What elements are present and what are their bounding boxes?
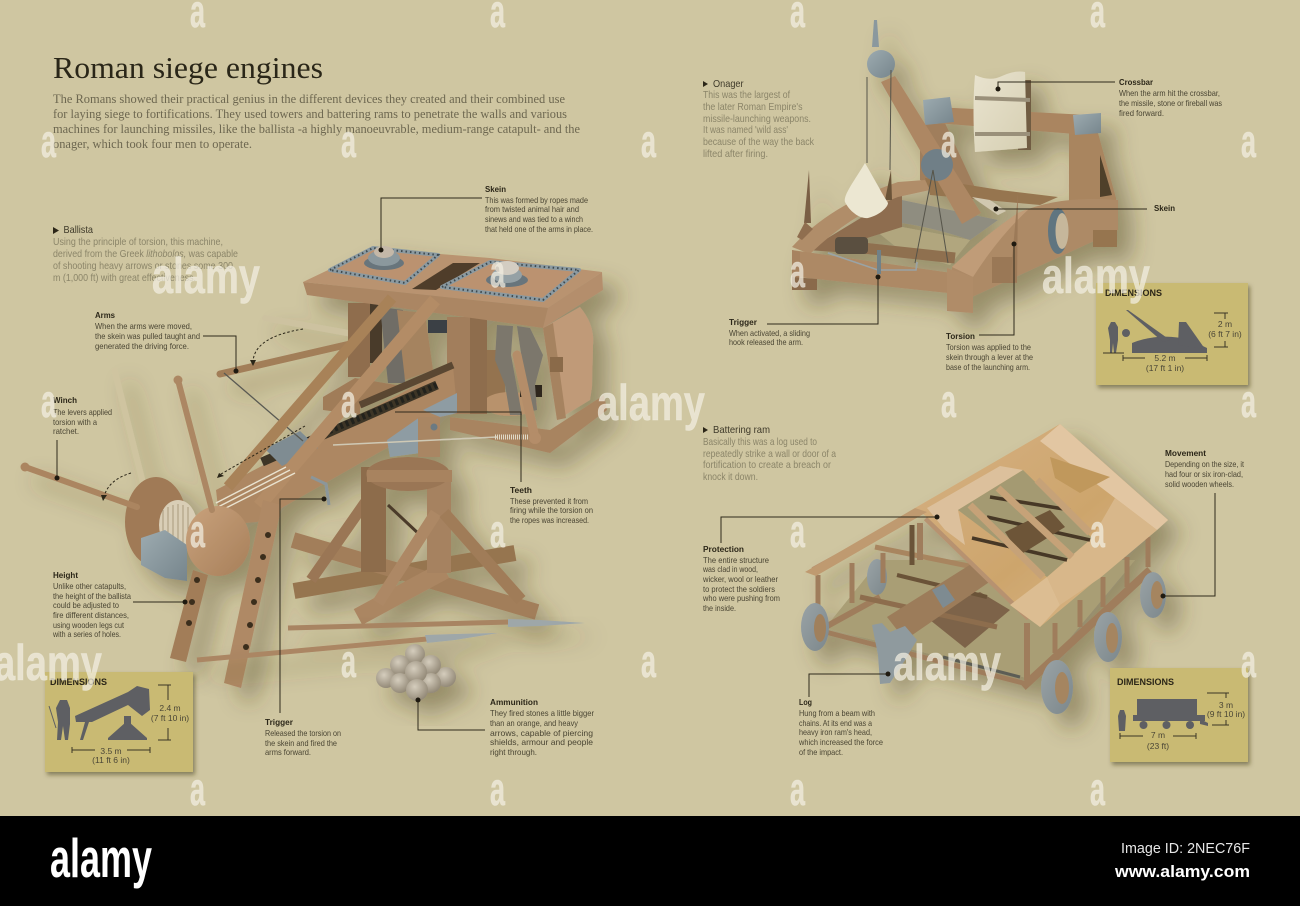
watermarks: a (1241, 375, 1256, 427)
watermarks: a (1241, 635, 1256, 687)
watermarks: a (1090, 763, 1105, 815)
text block: battering ram description: fortification to create a breach or (703, 459, 831, 471)
panel: onager dimensions (1096, 283, 1248, 385)
stones (376, 644, 456, 701)
arm (220, 344, 350, 374)
torsion string (224, 373, 528, 445)
watermarks: a (941, 375, 956, 427)
callout: movement: Depending on the size, it (1165, 459, 1245, 469)
top pin (872, 20, 879, 47)
onager height dimension (1103, 313, 1242, 353)
near skein (495, 325, 543, 415)
inner left wall (808, 193, 902, 252)
ballista width dimension: (11 ft 6 in) (92, 755, 130, 765)
text block: onager description (703, 89, 815, 160)
callout: skein: sinews and was tied to a winch (485, 214, 583, 224)
central pillar (447, 317, 487, 414)
onager height dimension: (6 ft 7 in) (1208, 329, 1242, 339)
callout: height: fire different distances, (53, 610, 129, 620)
heading: ballista: Ballista (64, 224, 93, 236)
launching arm (881, 76, 981, 224)
callout: protection: The entire structure (703, 555, 769, 565)
intro text block: machines for launching missiles, like the ballista -a highly manoeuvrable, medium-range catapult- and the (53, 122, 580, 136)
left rail (792, 180, 930, 254)
watermarks: a (1241, 115, 1256, 167)
watermarks: alamy (152, 248, 260, 304)
gable truss (813, 513, 1030, 617)
back rail (925, 178, 1058, 205)
ram head (872, 623, 917, 684)
watermarks: a (941, 115, 956, 167)
metal hook bar (828, 253, 917, 270)
winch rope (835, 237, 868, 254)
callout: winch: ratchet. (53, 426, 79, 436)
spike left (804, 170, 811, 223)
front leg (224, 500, 282, 688)
central pillar back wood (477, 350, 505, 398)
watermarks: alamy (1042, 248, 1150, 304)
gable corner patch (927, 466, 1023, 545)
heading: onager: Onager (713, 78, 744, 90)
callout: height: could be adjusted to (53, 600, 119, 610)
callout: trigger: Released the torsion on (265, 728, 341, 738)
ballista dashed motion arrows (101, 329, 305, 501)
bow lever (517, 355, 535, 438)
text block: battering ram description: Basically this was a log used to (703, 436, 817, 448)
text block: onager description: because of the way the back (703, 136, 815, 148)
callout: trigger: the skein and fired the (265, 738, 337, 748)
footer band (0, 816, 1300, 906)
watermarks: a (490, 245, 505, 297)
text block: onager description: It was named 'wild ass' (703, 124, 788, 136)
callout: onager skein: Skein (1154, 204, 1175, 213)
far pillar (348, 303, 370, 377)
right pillar (543, 307, 593, 420)
callout: crossbar: When the arm hit the crossbar, (1119, 88, 1220, 98)
callout: winch: Winch (53, 396, 77, 405)
site url: www.alamy.com (1114, 862, 1250, 881)
callout: height: the height of the ballista (53, 591, 131, 601)
frame beams (810, 523, 1150, 687)
text block: ballista description: Using the principle of torsion, this machine, (53, 236, 223, 248)
watermarks: a (641, 115, 656, 167)
skein cap right (442, 261, 579, 300)
image id: Image ID: 2NEC76F (1121, 840, 1250, 857)
torsion spike (1010, 193, 1018, 283)
leg holes (186, 532, 271, 650)
bottom frame (450, 395, 607, 453)
footer logo: alamy (50, 827, 152, 889)
callout: trigger: Trigger (265, 718, 293, 727)
callout: arms: When the arms were moved, (95, 321, 192, 331)
callout: log (798, 672, 890, 757)
interior floor (875, 227, 970, 265)
ropes (216, 467, 295, 511)
pouch (845, 163, 888, 218)
skein cap left (330, 246, 438, 283)
panel: ballista dimensions (45, 672, 193, 772)
callout: crossbar: the missile, stone or fireball was (1119, 98, 1222, 108)
callout: crossbar: Crossbar (1119, 78, 1153, 87)
panel: ballista dimensions: DIMENSIONS (50, 677, 107, 687)
purlins (972, 497, 1090, 560)
mortise block (992, 257, 1015, 283)
onager silhouette (1108, 310, 1207, 353)
callout: teeth: firing while the torsion on (510, 505, 593, 515)
callout: skein: This was formed by ropes made (485, 195, 588, 205)
stock beam (216, 366, 457, 525)
callout: winch: The levers applied (53, 407, 112, 417)
watermarks: a (641, 635, 656, 687)
front winch disc (186, 506, 250, 576)
callout: crossbar (996, 78, 1222, 118)
onager height dimension: 2 m (1218, 319, 1232, 329)
callout: log: which increased the force (798, 737, 883, 747)
callout: ammunition: shields, armour and people (490, 737, 593, 747)
axle beam (835, 245, 955, 258)
intro text block: The Romans showed their practical genius in the different devices they created and their combined use (53, 92, 565, 106)
text block: onager description: This was the largest of (703, 89, 790, 101)
rear leg (170, 570, 208, 662)
roof opening (958, 470, 1092, 577)
callout: height: Height (53, 571, 78, 580)
iron slider (265, 431, 318, 466)
front beam (792, 250, 952, 293)
callout: onager trigger: hook released the arm. (729, 337, 803, 347)
callout: log: heavy iron ram's head, (799, 727, 872, 737)
ballista height dimension (151, 685, 189, 740)
wheels (801, 572, 1166, 714)
callout: log: chains. At its end was a (799, 718, 872, 728)
arm cap (867, 50, 895, 78)
onager width dimension: 5.2 m (1154, 353, 1176, 363)
callout: ammunition: Ammunition (490, 698, 538, 707)
callout: skein: that held one of the arms in place. (485, 224, 593, 234)
iron box (141, 530, 187, 581)
watermarks: a (790, 245, 805, 297)
rafters (970, 480, 1090, 577)
callout: teeth (395, 412, 593, 525)
watermarks: a (490, 763, 505, 815)
slide channel (360, 365, 453, 405)
roof lower pale (1047, 498, 1157, 605)
pale arm ghost (265, 318, 353, 334)
callout: torsion (946, 242, 1033, 372)
watermarks: a (341, 635, 356, 687)
log (887, 527, 1043, 640)
text block: onager description: the later Roman Empire's (703, 101, 802, 113)
callout: arms (95, 311, 238, 374)
ram width dimension (1120, 730, 1196, 751)
rear winch disc (125, 477, 187, 567)
watermarks: a (790, 763, 805, 815)
ram width dimension: (23 ft) (1147, 741, 1169, 751)
battering ram illustration (801, 424, 1168, 714)
callout: movement (1160, 449, 1245, 598)
callout: protection: the inside. (703, 603, 736, 613)
callout: ammunition: than an orange, and heavy (490, 718, 579, 728)
panel: battering ram dimensions (1110, 668, 1248, 762)
text block: onager description: lifted after firing. (703, 148, 768, 160)
callout: teeth: These prevented it from (510, 496, 588, 506)
ballista machine illustration (20, 246, 607, 688)
iron ring (1048, 208, 1068, 254)
right rail (950, 199, 1118, 300)
text block: ballista description (53, 236, 238, 284)
callout: trigger (265, 496, 341, 757)
ram height dimension: (9 ft 10 in) (1207, 709, 1245, 719)
callout: height (52, 571, 188, 639)
callout: height: Unlike other catapults, (53, 581, 126, 591)
callout: winch (53, 396, 112, 480)
callout: skein: from twisted animal hair and (485, 204, 579, 214)
rear wheel (867, 559, 887, 595)
callout: teeth: Teeth (510, 486, 532, 495)
callout: height: with a series of holes. (52, 629, 121, 639)
arrow top (288, 619, 585, 628)
callout: ammunition: They fired stones a little bigger (490, 708, 594, 718)
callout: crossbar: fired forward. (1119, 108, 1164, 118)
callout: skein: Skein (485, 185, 506, 194)
floor (825, 560, 1135, 680)
callout: log: of the impact. (799, 747, 843, 757)
callout: log: Hung from a beam with (799, 708, 875, 718)
callout: arms: the skein was pulled taught and (95, 331, 200, 341)
small wood spike (885, 170, 892, 200)
skein band (902, 200, 998, 240)
heading: ballista (53, 224, 93, 236)
callout: onager trigger (729, 274, 880, 347)
roof (915, 424, 1168, 627)
pale lever ghost (114, 368, 146, 495)
left lower frame (323, 378, 402, 415)
right post (1069, 133, 1116, 222)
panel: onager dimensions: DIMENSIONS (1105, 288, 1162, 298)
callout: onager trigger: When activated, a sliding (729, 328, 810, 338)
callout: skein (378, 185, 593, 252)
ballista silhouette (49, 686, 150, 740)
watermarks: a (341, 375, 356, 427)
callout: height: using wooden legs cut (53, 620, 125, 630)
callout: torsion: Torsion was applied to the (946, 342, 1031, 352)
iron rod (943, 657, 1020, 677)
watermarks: a (1090, 505, 1105, 557)
intro text block: for laying siege to fortifications. They used towers and battering rams to penetrate the walls and various (53, 107, 567, 121)
left post (920, 123, 977, 192)
text block: battering ram description: knock it down. (703, 471, 758, 483)
ballista width dimension (72, 746, 150, 765)
callout: protection: to protect the soldiers (703, 584, 775, 594)
crossbar (935, 107, 1088, 135)
callout: movement: Movement (1165, 449, 1206, 458)
iron trigger hook (311, 477, 329, 505)
far skein (380, 307, 405, 383)
front lever (178, 380, 212, 510)
title: Roman siege engines (53, 50, 323, 85)
floor planks (920, 592, 1010, 648)
callout: protection: Protection (703, 545, 744, 554)
callout: torsion: base of the launching arm. (946, 362, 1030, 372)
callout: protection (702, 514, 940, 613)
callout: torsion: skein through a lever at the (946, 352, 1033, 362)
text block: battering ram description: repeatedly strike a wall or door of a (703, 448, 836, 460)
watermarks: alamy (893, 635, 1001, 691)
onager width dimension (1123, 353, 1207, 373)
ram width dimension: 7 m (1151, 730, 1165, 740)
ballista height dimension: 2.4 m (159, 703, 181, 713)
text block: ballista description: of shooting heavy arrows or stones some 300 (53, 260, 233, 272)
callout: protection: was clad in wood, (702, 564, 758, 574)
ballista height dimension: (7 ft 10 in) (151, 713, 189, 723)
top frame (303, 250, 602, 308)
watermarks: a (41, 115, 56, 167)
callout: trigger: arms forward. (265, 747, 311, 757)
inner log (1005, 510, 1065, 555)
callout: onager skein (994, 204, 1175, 213)
callout: onager trigger: Trigger (729, 318, 757, 327)
cushion (974, 72, 1031, 152)
text block: battering ram description (703, 436, 836, 483)
roof light band (1040, 424, 1168, 530)
ram height dimension (1207, 693, 1245, 725)
callout: winch: torsion with a (53, 417, 97, 427)
callout: arms: generated the driving force. (95, 341, 189, 351)
onager machine illustration (792, 20, 1118, 313)
collar (921, 149, 953, 181)
callout: protection: wicker, wool or leather (702, 574, 778, 584)
slide rack (262, 385, 437, 462)
arrows and stones (197, 619, 585, 701)
rope spool (159, 500, 197, 550)
cords (867, 70, 948, 263)
intro text block: onager, which took four men to operate. (53, 137, 252, 151)
roof edge pale patch (1010, 577, 1060, 627)
callout: torsion: Torsion (946, 332, 975, 341)
ballista width dimension: 3.5 m (100, 746, 122, 756)
text block: onager description: missile-launching weapons. (703, 113, 811, 125)
arrow bottom (197, 633, 498, 660)
heading: battering ram: Battering ram (713, 424, 770, 436)
winch lever back (25, 467, 137, 507)
iron brackets (387, 417, 420, 457)
text block: ballista description: derived from the Greek lithobolos, was capable (53, 248, 238, 260)
watermarks: a (341, 115, 356, 167)
watermarks: alamy (597, 375, 705, 431)
callout: protection: who were pushing from (702, 593, 780, 603)
intro text block (53, 92, 580, 151)
callout: movement: solid wooden wheels. (1165, 479, 1234, 489)
roof dark patch (1050, 457, 1110, 493)
struts (228, 298, 392, 487)
text block: ballista description: m (1,000 ft) with great effectiveness. (53, 272, 196, 284)
callout: ammunition (416, 698, 594, 757)
battering ram silhouette (1118, 699, 1208, 731)
watermarks: a (790, 505, 805, 557)
callout: ammunition: right through. (490, 747, 537, 757)
onager width dimension: (17 ft 1 in) (1146, 363, 1184, 373)
callout: ammunition: arrows, capable of piercing (490, 728, 593, 738)
callout: log: Log (799, 698, 812, 707)
second pillar (397, 310, 433, 380)
callout: movement: had four or six iron-clad, (1165, 469, 1243, 479)
watermarks: a (41, 375, 56, 427)
watermarks: a (190, 505, 205, 557)
callout: arms: Arms (95, 311, 116, 320)
watermarks: a (190, 763, 205, 815)
pedestal tripod (293, 457, 537, 617)
ram height dimension: 3 m (1219, 700, 1233, 710)
callout: teeth: the ropes was increased. (510, 515, 589, 525)
panel: battering ram dimensions: DIMENSIONS (1117, 677, 1174, 687)
watermarks: a (490, 505, 505, 557)
heading: onager (703, 78, 744, 90)
